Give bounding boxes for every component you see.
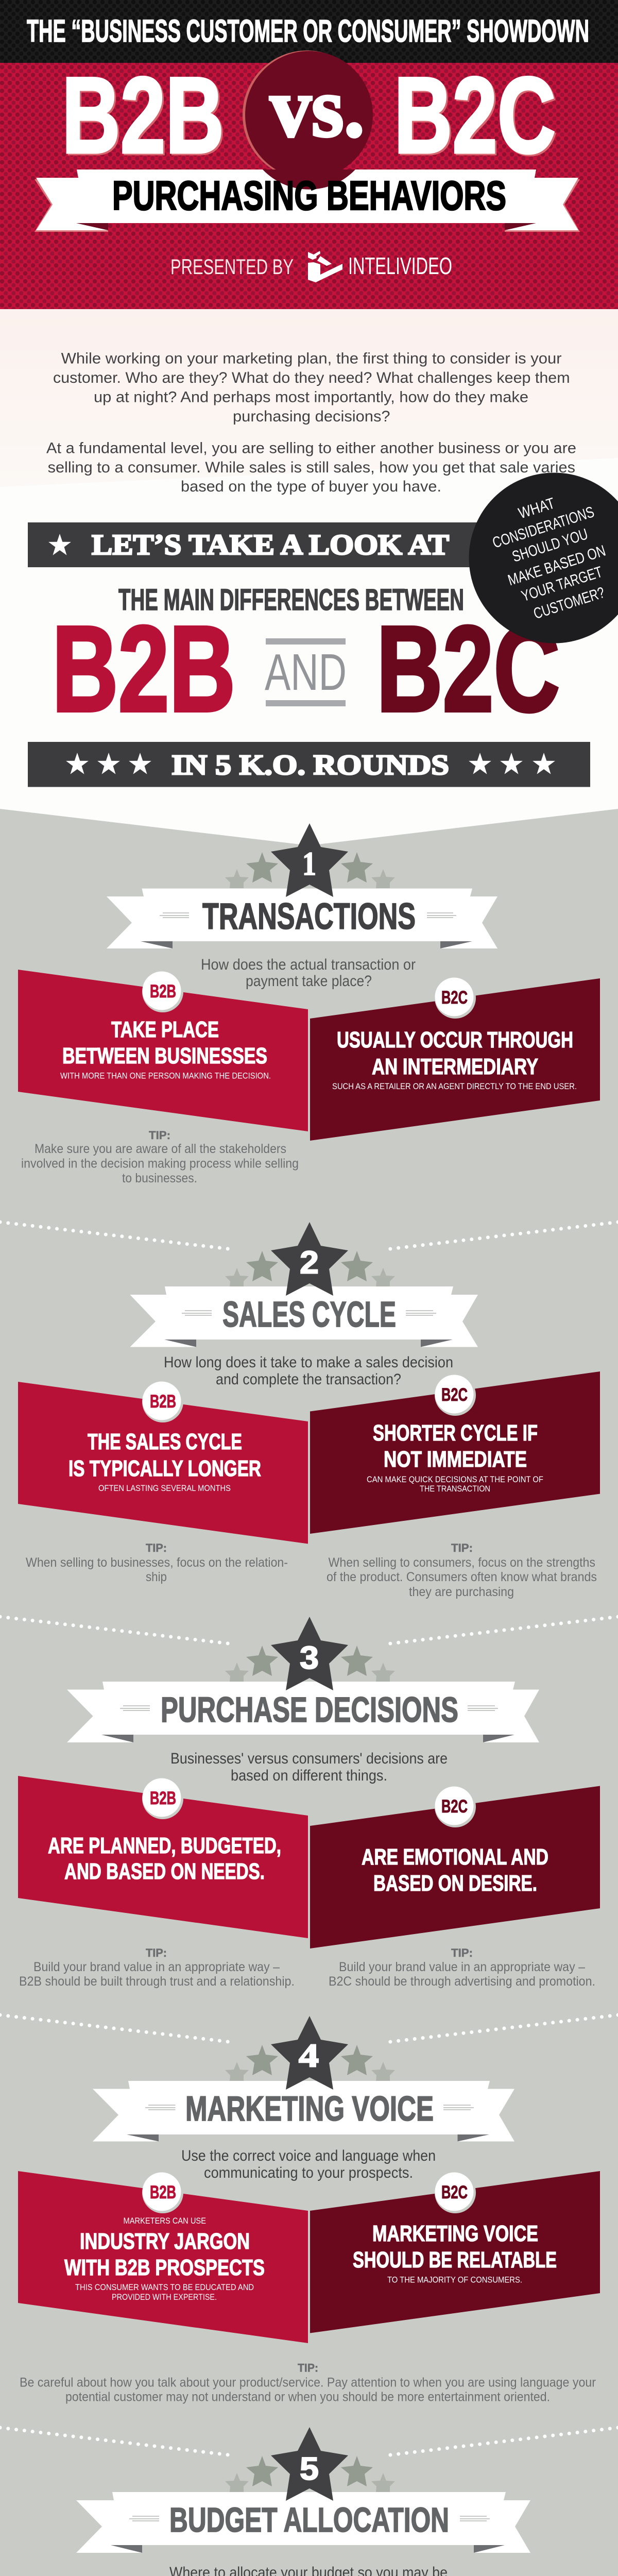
- badge: B2C: [441, 988, 468, 1008]
- panel: B2B marketing voice: [18, 2171, 308, 2343]
- round title: SALES CYCLE: [222, 1294, 396, 1334]
- panel note: [367, 1475, 543, 1494]
- tip 2 right: [327, 1541, 597, 1599]
- badge: B2B: [150, 1392, 176, 1412]
- panel heading: [48, 1833, 281, 1884]
- panel heading: WITH B2B PROSPECTS: [64, 2255, 265, 2280]
- star decoration: [225, 2045, 395, 2081]
- panel lead: MARKETERS CAN USE: [124, 2216, 206, 2226]
- badge: [435, 977, 476, 1019]
- ribbon: [93, 2081, 514, 2141]
- intro paragraph 1: up at night? And perhaps most importantly, how do they make: [94, 389, 528, 406]
- ROUND 2: [130, 1222, 478, 1347]
- panel: B2C marketing voice: [310, 2171, 600, 2333]
- panel heading: TAKE PLACE: [111, 1017, 219, 1042]
- badge: [142, 971, 183, 1012]
- star decoration: [225, 1646, 395, 1682]
- round title: BUDGET ALLOCATION: [169, 2501, 449, 2539]
- tip 2 left: ship: [146, 1570, 167, 1584]
- tip 1: to businesses.: [122, 1171, 197, 1185]
- panel heading: AN INTERMEDIARY: [372, 1054, 538, 1079]
- tip 4: [20, 2362, 596, 2404]
- tip 2 left: When selling to businesses, focus on the relation-: [26, 1555, 288, 1570]
- panel heading: MARKETING VOICE: [372, 2221, 538, 2246]
- callout circle: [469, 473, 618, 643]
- panel note: THIS CONSUMER WANTS TO BE EDUCATED AND: [75, 2282, 254, 2292]
- ribbon: [130, 1286, 478, 1347]
- ribbon: [107, 889, 497, 948]
- panel: B2B purchase decisions: [18, 1776, 308, 1938]
- intro paragraph 1: purchasing decisions?: [233, 408, 390, 425]
- panel heading: [337, 1027, 573, 1079]
- badge: B2B: [150, 981, 176, 1002]
- question 4: [181, 2147, 436, 2181]
- big B2B: B2B: [52, 601, 235, 737]
- tip 3 left: Build your brand value in an appropriate way –: [33, 1960, 280, 1974]
- dotted divider 4: [0, 2015, 618, 2042]
- star decoration: [225, 852, 395, 888]
- tip 3 right: Build your brand value in an appropriate way –: [339, 1960, 585, 1974]
- star with number: 1: [302, 845, 316, 883]
- panel: B2C purchase decisions: [310, 1786, 600, 1948]
- panel heading: BETWEEN BUSINESSES: [62, 1043, 267, 1069]
- tip 2 right: TIP:: [451, 1541, 473, 1554]
- question 4: communicating to your prospects.: [204, 2164, 413, 2181]
- panel note: THE TRANSACTION: [420, 1484, 490, 1494]
- icon: white logo: [308, 251, 342, 282]
- star decoration: [225, 1251, 395, 1287]
- panel heading: NOT IMMEDIATE: [384, 1447, 527, 1472]
- banner: in 5 K.O. rounds: [28, 742, 590, 787]
- panel heading: ARE EMOTIONAL AND: [362, 1844, 548, 1870]
- panel heading: ARE PLANNED, BUDGETED,: [48, 1833, 281, 1858]
- badge: B2B: [150, 1788, 176, 1808]
- star with number: 4: [299, 2038, 319, 2075]
- round title: TRANSACTIONS: [202, 896, 416, 937]
- panel: B2C sales cycle: [310, 1371, 600, 1534]
- tip 4: potential customer may not understand or when you should be more entertainment oriented.: [65, 2390, 550, 2404]
- callout question: WHAT: [517, 495, 557, 522]
- star with number: 5: [300, 2451, 319, 2487]
- tip 3 left: B2B should be built through trust and a relationship.: [19, 1974, 295, 1989]
- question 3: based on different things.: [231, 1767, 387, 1784]
- tip 2 right: of the product. Consumers often know what brands: [327, 1570, 597, 1584]
- badge: [142, 1381, 183, 1422]
- badge: [435, 1786, 476, 1827]
- tip 2 left: [26, 1541, 288, 1584]
- hero: B2B: B2B: [62, 55, 224, 176]
- tip 1: [21, 1129, 299, 1185]
- ROUND 1: [107, 823, 497, 948]
- ROUND 3: [67, 1617, 539, 1742]
- question 1: [201, 956, 416, 990]
- AND with rules: AND: [265, 643, 347, 701]
- brand name: INTELIVIDEO: [348, 252, 452, 279]
- round title: PURCHASE DECISIONS: [161, 1690, 458, 1730]
- badge: [142, 1778, 183, 1819]
- versus circle: [243, 50, 373, 179]
- panel: B2C transactions: [310, 977, 600, 1141]
- question 3: Businesses' versus consumers' decisions are: [170, 1750, 448, 1767]
- panel note: SUCH AS A RETAILER OR AN AGENT DIRECTLY TO THE END USER.: [332, 1081, 577, 1091]
- banner text: IN 5 K.O. ROUNDS: [171, 749, 449, 781]
- panel heading: THE SALES CYCLE: [88, 1429, 242, 1454]
- tip 4: TIP:: [298, 2362, 318, 2374]
- star with number: 2: [300, 1245, 319, 1281]
- hero: B2C: B2C: [394, 55, 556, 176]
- big B2C: B2C: [376, 601, 560, 737]
- tip 1: TIP:: [149, 1129, 170, 1142]
- star with number: [271, 1617, 348, 1690]
- ROUND 5: [76, 2427, 530, 2553]
- panel heading: SHORTER CYCLE IF: [373, 1420, 538, 1446]
- badge: B2C: [441, 2182, 468, 2202]
- badge: [142, 2172, 183, 2213]
- callout question: SHOULD YOU: [510, 526, 590, 566]
- intro paragraph 2: [46, 439, 576, 495]
- ribbon: [67, 1682, 539, 1742]
- star with number: [271, 1222, 348, 1296]
- intro paragraph 2: based on the type of buyer you have.: [181, 478, 441, 495]
- intro paragraph 1: While working on your marketing plan, the first thing to consider is your: [61, 350, 562, 367]
- icon: stars left: [66, 753, 151, 774]
- header: black strip: [0, 0, 618, 63]
- tip 3 left: TIP:: [146, 1946, 167, 1959]
- panel heading: BASED ON DESIRE.: [373, 1871, 537, 1896]
- question 2: [164, 1354, 453, 1388]
- ROUND 4: [93, 2016, 514, 2141]
- intro paragraph 1: customer. Who are they? What do they need? What challenges keep them: [53, 369, 570, 386]
- tip 3 right: B2C should be through advertising and promotion.: [329, 1974, 595, 1989]
- star with number: [271, 2427, 348, 2501]
- panel heading: [64, 2229, 265, 2280]
- question 1: payment take place?: [246, 973, 372, 990]
- circle overlap on ribbon: [263, 170, 355, 190]
- tip 1: involved in the decision making process while selling: [21, 1156, 299, 1171]
- intro paragraph 2: selling to a consumer. While sales is still sales, how you get that sale varies: [48, 459, 575, 476]
- dotted divider 5: [0, 2428, 618, 2455]
- grey rounds background: [0, 809, 618, 2576]
- header ribbon: [35, 170, 580, 232]
- star decoration: [225, 2456, 395, 2492]
- panel heading: [373, 1420, 538, 1472]
- tip 2 right: they are purchasing: [409, 1585, 514, 1599]
- panel heading: [362, 1844, 548, 1896]
- dotted divider 3: [0, 1617, 618, 1644]
- panel note: PROVIDED WITH EXPERTISE.: [112, 2292, 217, 2302]
- star with number: 3: [300, 1640, 319, 1676]
- icon: stars right: [469, 753, 555, 774]
- presented by: PRESENTED BY: [170, 255, 294, 279]
- question 2: and complete the transaction?: [216, 1371, 401, 1388]
- badge: [435, 1375, 476, 1416]
- banner: let's take a look at: [28, 522, 543, 567]
- star with number: [271, 2016, 348, 2090]
- question 3: [170, 1750, 448, 1784]
- panel heading: AND BASED ON NEEDS.: [64, 1859, 265, 1884]
- badge: B2C: [441, 1797, 468, 1817]
- panel note: CAN MAKE QUICK DECISIONS AT THE POINT OF: [367, 1475, 543, 1484]
- banner text: LET’S TAKE A LOOK AT: [92, 529, 449, 561]
- star with number: [271, 823, 348, 897]
- panel note: OFTEN LASTING SEVERAL MONTHS: [98, 1483, 231, 1493]
- badge: B2C: [441, 1385, 468, 1405]
- tip 3 left: [19, 1946, 295, 1989]
- versus text: vs.: [270, 60, 365, 155]
- tip 3 right: TIP:: [451, 1946, 473, 1959]
- question 2: How long does it take to make a sales decision: [164, 1354, 453, 1371]
- panel heading: INDUSTRY JARGON: [80, 2229, 250, 2254]
- badge: [435, 2172, 476, 2213]
- panel heading: [68, 1429, 261, 1481]
- round title: MARKETING VOICE: [185, 2089, 434, 2128]
- icon: star: [48, 534, 71, 555]
- panel heading: [353, 2221, 557, 2273]
- intro paragraph 1: [53, 350, 570, 425]
- panel: B2B transactions: [18, 970, 308, 1131]
- tip 2 right: When selling to consumers, focus on the strengths: [329, 1555, 595, 1570]
- AND with rules: [265, 638, 347, 706]
- tip 3 right: [329, 1946, 595, 1989]
- badge: B2B: [150, 2182, 176, 2202]
- panel note: WITH MORE THAN ONE PERSON MAKING THE DECISION.: [60, 1071, 271, 1081]
- ribbon: [76, 2492, 530, 2553]
- panel note: [75, 2282, 254, 2302]
- intro paragraph 2: At a fundamental level, you are selling to either another business or you are: [46, 439, 576, 456]
- question 1: How does the actual transaction or: [201, 956, 416, 973]
- tip 2 left: TIP:: [146, 1541, 167, 1554]
- callout question: [490, 495, 608, 622]
- tip 1: Make sure you are aware of all the stakeholders: [35, 1142, 286, 1156]
- panel: B2B sales cycle: [18, 1381, 308, 1544]
- dotted divider 2: [0, 1222, 618, 1249]
- panel heading: IS TYPICALLY LONGER: [68, 1456, 261, 1481]
- question 4: Use the correct voice and language when: [181, 2147, 436, 2164]
- panel note: TO THE MAJORITY OF CONSUMERS.: [387, 2275, 522, 2284]
- panel heading: [62, 1017, 267, 1069]
- header: red textured panel: [0, 63, 618, 309]
- intro background band: [0, 309, 618, 487]
